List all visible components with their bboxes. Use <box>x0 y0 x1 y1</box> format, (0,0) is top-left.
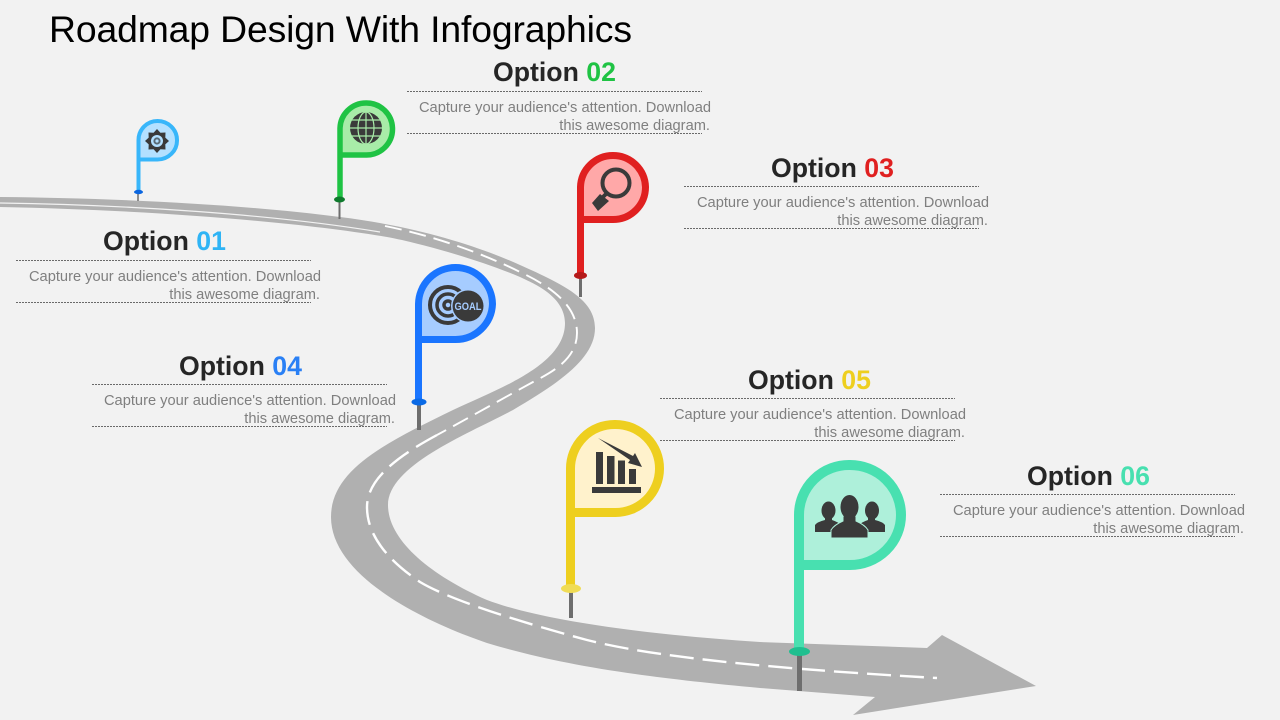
flag pin 3 <box>574 155 646 297</box>
title: Roadmap Design With Infographics <box>49 8 632 50</box>
text block: option 03 <box>684 153 989 229</box>
text block: option 04: Option 04 <box>179 351 302 381</box>
flag pin 2 <box>334 103 392 219</box>
text block: option 01 <box>16 226 321 303</box>
text block: option 04: this awesome diagram. <box>244 411 395 427</box>
icon: globe <box>350 112 382 144</box>
text block: option 03: this awesome diagram. <box>837 213 988 229</box>
icon: goal target <box>430 287 485 323</box>
text block: option 02: Capture your audience's attention. Download <box>419 100 711 116</box>
text block: option 05: this awesome diagram. <box>814 425 965 441</box>
icon: people <box>815 495 885 538</box>
text block: option 05 <box>660 365 966 441</box>
text block: option 06: Capture your audience's attention. Download <box>953 503 1245 519</box>
text block: option 06: this awesome diagram. <box>1093 521 1244 537</box>
text block: option 03: Option 03 <box>771 153 894 183</box>
text block: option 04: Capture your audience's attention. Download <box>104 393 396 409</box>
icon: gear <box>145 129 169 153</box>
text block: option 04 <box>92 351 396 427</box>
text block: option 03: Capture your audience's attention. Download <box>697 195 989 211</box>
text block: option 01: this awesome diagram. <box>169 287 320 303</box>
flag pin 5 <box>561 424 660 618</box>
flag pin 6 <box>789 465 901 691</box>
icon: magnifier <box>592 170 630 211</box>
text block: option 02: Option 02 <box>493 57 616 87</box>
text block: option 01: Capture your audience's attention. Download <box>29 269 321 285</box>
text block: option 02: this awesome diagram. <box>559 118 710 134</box>
text block: option 02 <box>407 57 711 134</box>
text block: option 05: Option 05 <box>748 365 871 395</box>
road with arrow head <box>0 197 1036 715</box>
flag pin 1 <box>134 121 177 201</box>
text block: option 01: Option 01 <box>103 226 226 256</box>
flag pin 4 <box>412 267 492 430</box>
text block: option 06: Option 06 <box>1027 461 1150 491</box>
text block: option 05: Capture your audience's attention. Download <box>674 407 966 423</box>
icon: declining bar chart <box>592 438 642 493</box>
text block: option 06 <box>940 461 1245 537</box>
icon: goal target: GOAL <box>454 301 482 313</box>
